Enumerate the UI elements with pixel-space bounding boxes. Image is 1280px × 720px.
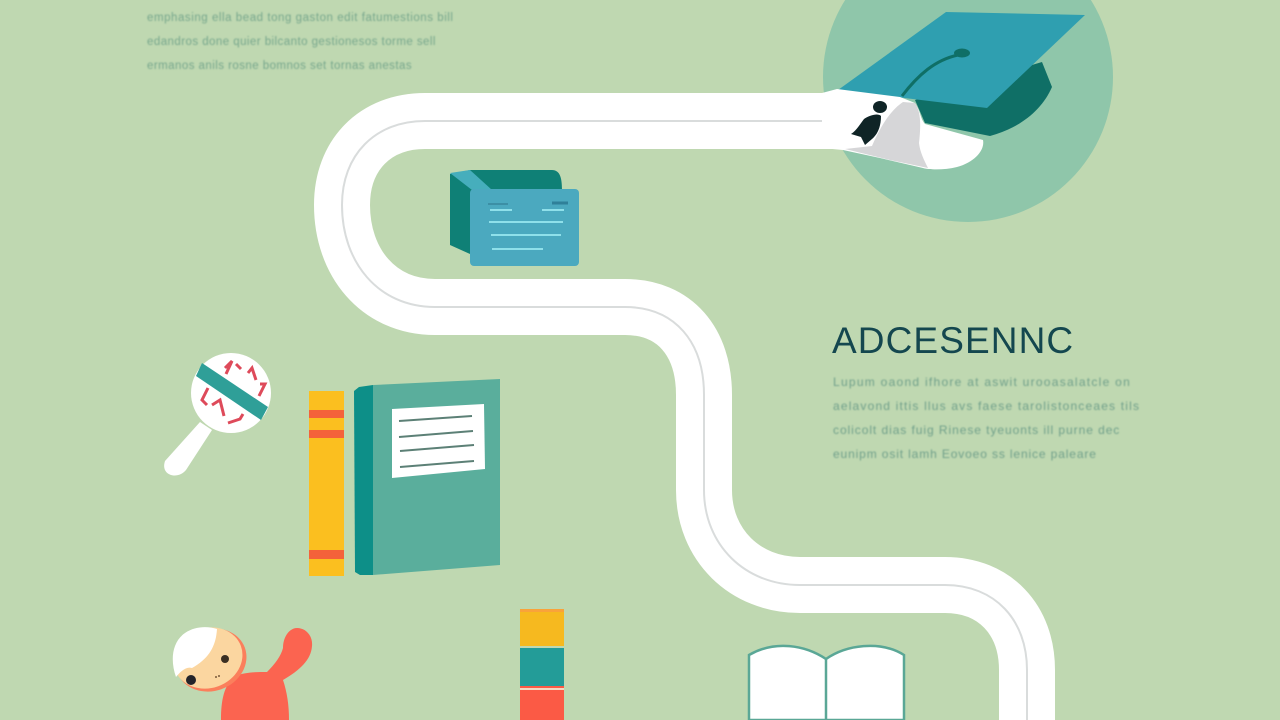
icon: open book <box>749 646 904 720</box>
top left text block: emphasing ella bead tong gaston edit fatumestions bill <box>147 12 454 24</box>
icon: green notebook <box>354 379 500 575</box>
icon: magnifier rattle <box>164 353 271 476</box>
right text block: aelavond ittis llus avs faese tarolistonceaes tils <box>833 399 1140 413</box>
winding white road <box>342 121 1027 720</box>
white ribbon end of the road <box>822 89 983 169</box>
right text block: eunipm osit lamh Eovoeo ss lenice paleare <box>833 447 1097 461</box>
right text block <box>832 375 1140 461</box>
circle behind graduation cap <box>823 0 1113 222</box>
graduation cap <box>838 12 1085 136</box>
right text block: colicolt dias fuig Rinese tyeuonts ill purne dec <box>833 423 1120 437</box>
heading: ADCESENNC <box>832 320 1074 361</box>
top left text block: ermanos anils rosne bomnos set tornas anestas <box>147 60 412 72</box>
top left text block: edandros done quier bilcanto gestionesos torme sell <box>147 36 436 48</box>
black tassel figure <box>851 101 887 145</box>
top left text block <box>146 12 454 72</box>
right text block: Lupum oaond ifhore at aswit urooasalatcle on <box>833 375 1131 389</box>
icon: baby figure <box>165 618 312 720</box>
icon: teal folder card <box>450 170 579 266</box>
icon: coloured book stack <box>520 609 564 720</box>
icon: yellow book spine <box>309 391 344 576</box>
